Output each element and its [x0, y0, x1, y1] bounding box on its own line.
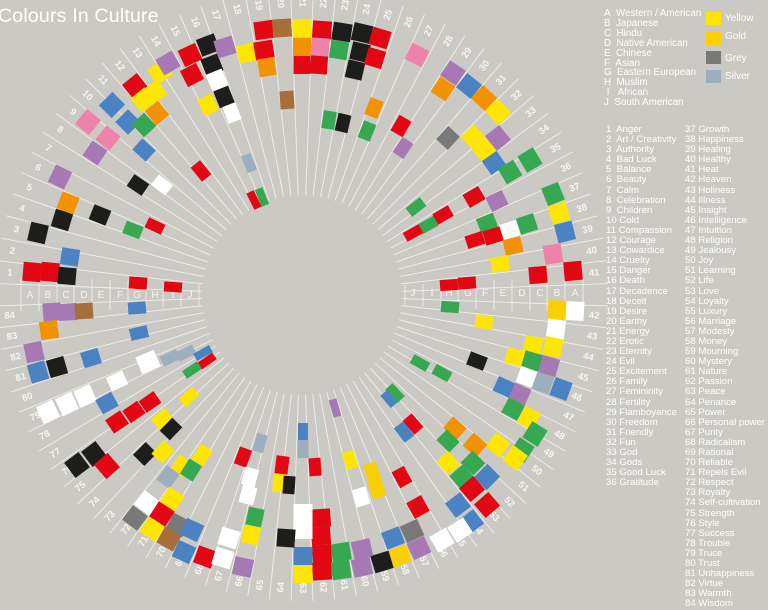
sector number labels: 51 — [516, 479, 532, 495]
keyword list column 2: 56 Marriage — [685, 316, 736, 327]
sector number labels: 28 — [441, 34, 456, 49]
ring letters right: C — [536, 288, 544, 299]
sector number labels: 70 — [154, 545, 169, 559]
cells: upper-right quadrant — [292, 19, 583, 291]
keyword list column 2: 66 Personal power — [685, 417, 765, 428]
sector number labels: 79 — [28, 410, 43, 424]
keyword list column 1: 28 Fertility — [606, 397, 650, 408]
keyword list column 2: 61 Nature — [685, 366, 727, 377]
legend: colour swatches — [706, 12, 754, 83]
keyword list column 2: 82 Virtue — [685, 578, 723, 589]
ring letters right: I — [431, 288, 433, 299]
sector number labels: 61 — [337, 579, 350, 592]
sector number labels: 37 — [568, 181, 582, 195]
ring letters left: A — [27, 290, 34, 301]
keyword list column 2: 42 Heaven — [685, 174, 731, 185]
sector number labels: 14 — [148, 34, 163, 49]
keyword list column 2: 37 Growth — [685, 124, 729, 135]
keyword list column 2: 79 Truce — [685, 548, 722, 559]
keyword list column 1: 15 Danger — [606, 265, 651, 276]
keyword list column 1: 8 Celebration — [606, 195, 666, 206]
ring letters right: J — [410, 288, 416, 299]
sector number labels: 53 — [486, 509, 501, 524]
keyword list column 2: 38 Happiness — [685, 134, 744, 145]
keyword list column 2: 43 Holiness — [685, 185, 735, 196]
sector number labels: 55 — [453, 534, 468, 549]
keyword list column 2: 44 Illness — [685, 195, 726, 206]
sector number labels: 35 — [548, 141, 564, 156]
keyword list column 2: 40 Healthy — [685, 154, 731, 165]
keyword list column 1: 21 Energy — [606, 326, 650, 337]
keyword list column 1: 5 Balance — [606, 164, 651, 175]
sector number labels: 75 — [73, 479, 89, 494]
sector number labels: 1 — [7, 267, 14, 279]
keyword list column 1: 31 Friendly — [606, 427, 653, 438]
keyword list column 2: 74 Self-cultivation — [685, 497, 761, 508]
cells: lower-left quadrant — [23, 301, 296, 578]
keyword list column 2: 50 Joy — [685, 255, 713, 266]
sector number labels: 4 — [18, 203, 27, 215]
keyword list column 1: 32 Fun — [606, 437, 636, 448]
keyword list column 1: 9 Children — [606, 205, 652, 216]
keyword list column 1: 3 Authority — [606, 144, 654, 155]
legend: cultures: J South American — [604, 97, 684, 108]
keyword list column 2: 64 Penance — [685, 397, 736, 408]
sector number labels: 39 — [581, 223, 594, 236]
legend: colour swatches: Yellow — [725, 13, 754, 24]
keyword list column 1: 22 Erotic — [606, 336, 644, 347]
sector number labels: 68 — [193, 563, 207, 576]
keyword list column 1: 26 Family — [606, 376, 648, 387]
sector number labels: 81 — [14, 371, 28, 384]
sector number labels: 52 — [502, 495, 517, 510]
keyword list column 1: 36 Gratitude — [606, 477, 659, 488]
keyword list column 1: 13 Cowardice — [606, 245, 665, 256]
sector number labels: 64 — [275, 581, 287, 593]
keyword list column 1: 35 Good Luck — [606, 467, 666, 478]
sector number labels: 7 — [43, 142, 53, 155]
ring letters left: F — [117, 290, 123, 301]
sector number labels: 11 — [95, 73, 111, 88]
keyword list column 2: 71 Repels Evil — [685, 467, 746, 478]
keyword list column 1: 12 Courage — [606, 235, 656, 246]
sector number labels: 32 — [509, 88, 524, 103]
keyword list column 2: 60 Mystery — [685, 356, 732, 367]
sector number labels: 41 — [588, 267, 601, 279]
sector number labels: 83 — [6, 330, 18, 343]
keyword list column 1: 33 God — [606, 447, 637, 458]
sector number labels: 54 — [470, 522, 486, 538]
sector number labels: 71 — [136, 533, 151, 549]
ring letters left: J — [188, 290, 192, 301]
keyword list column 2: 84 Wisdom — [685, 598, 733, 609]
cells: upper-left quadrant — [22, 18, 295, 293]
sector number labels: 44 — [582, 351, 595, 364]
ring letters left: D — [80, 290, 88, 301]
keyword list column 1: 11 Compassion — [606, 225, 672, 236]
title: Colours In Culture — [0, 5, 159, 27]
sector number labels: 50 — [529, 463, 544, 478]
keyword list column 2: 51 Learning — [685, 265, 736, 276]
sector number labels: 76 — [60, 463, 75, 478]
ring letters left: B — [45, 290, 52, 301]
sector number labels: 84 — [4, 310, 16, 322]
ring letters left — [27, 290, 192, 301]
keyword list column 1: 30 Freedom — [606, 417, 658, 428]
sector number labels: 43 — [586, 330, 598, 343]
sector number labels: 33 — [524, 105, 539, 120]
legend: cultures: C Hindu — [604, 28, 642, 39]
sector number labels: 40 — [586, 245, 598, 258]
legend: cultures: E Chinese — [604, 48, 652, 59]
keyword list column 2: 55 Luxury — [685, 306, 727, 317]
legend: colour swatches: Grey — [725, 53, 747, 64]
sector number labels: 38 — [575, 202, 589, 215]
keyword list column 2: 48 Religion — [685, 235, 733, 246]
keyword list column 1: 25 Excitement — [606, 366, 667, 377]
legend: cultures: H Muslim — [604, 77, 648, 88]
sector number labels: 57 — [417, 554, 431, 569]
sector number labels — [4, 0, 601, 593]
ring letters left: G — [133, 290, 141, 301]
ring letters left: E — [98, 290, 105, 301]
legend: cultures: B Japanese — [604, 18, 658, 29]
ring letters right: F — [482, 288, 488, 299]
sector number labels: 34 — [537, 122, 552, 137]
keyword list column 2: 65 Power — [685, 407, 726, 418]
ring letters right — [410, 288, 579, 299]
ring letters right: A — [572, 288, 579, 299]
keyword list column 1: 4 Bad Luck — [606, 154, 657, 165]
sector number labels: 13 — [129, 45, 144, 60]
keyword list column 2: 47 Intuition — [685, 225, 732, 236]
sector number labels: 31 — [494, 72, 509, 88]
sector number labels: 5 — [25, 182, 34, 194]
keyword list column 2: 58 Money — [685, 336, 727, 347]
sector number labels: 25 — [382, 8, 395, 22]
keyword list column 2: 54 Loyalty — [685, 296, 729, 307]
sector number labels: 27 — [422, 24, 436, 38]
keyword list column 2: 76 Style — [685, 518, 720, 529]
sector number labels: 29 — [460, 45, 475, 60]
ring letters right: H — [445, 288, 453, 299]
sector number labels: 80 — [21, 390, 34, 404]
keyword list column 1: 23 Eternity — [606, 346, 652, 357]
sector number labels: 36 — [559, 161, 573, 175]
keyword list column 2: 73 Royalty — [685, 487, 730, 498]
keyword list column 1: 27 Femininity — [606, 386, 663, 397]
legend: cultures: F Asian — [604, 58, 640, 69]
sector number labels: 62 — [317, 582, 329, 593]
sector number labels: 65 — [254, 578, 267, 591]
ring letters left: C — [62, 290, 70, 301]
sector number labels: 72 — [119, 522, 134, 537]
sector number labels: 16 — [188, 15, 202, 29]
keyword list column 1 — [606, 124, 677, 488]
ring letters right: E — [500, 288, 507, 299]
sector number labels: 47 — [561, 410, 576, 424]
keyword list column 2: 62 Passion — [685, 376, 732, 387]
keyword list column 1: 14 Cruelty — [606, 255, 650, 266]
keyword list column 2: 70 Reliable — [685, 457, 733, 468]
keyword list column 2: 67 Purity — [685, 427, 723, 438]
sector number labels: 58 — [397, 563, 411, 576]
keyword list column 2: 41 Heat — [685, 164, 719, 175]
sector number labels: 49 — [541, 446, 556, 461]
ring letters left: I — [172, 290, 174, 301]
sector number labels: 6 — [33, 162, 43, 174]
sector number labels: 59 — [378, 570, 391, 583]
sector number labels: 77 — [48, 446, 63, 461]
sector number labels: 73 — [103, 509, 118, 524]
ring letters right: G — [464, 288, 472, 299]
keyword list column 2: 46 Intelligence — [685, 215, 747, 226]
legend: cultures: A Western / American — [604, 8, 701, 19]
sector number labels: 74 — [87, 494, 103, 510]
keyword list column 2: 39 Healing — [685, 144, 731, 155]
keyword list column 2: 49 Jealousy — [685, 245, 736, 256]
legend: cultures: I African — [607, 87, 648, 98]
keyword list column 2: 78 Trouble — [685, 538, 730, 549]
keyword list column 1: 18 Deceit — [606, 296, 647, 307]
sector number labels: 12 — [112, 58, 127, 73]
ring letters right: D — [518, 288, 526, 299]
sector number labels: 45 — [577, 371, 590, 384]
keyword list column 1: 10 Cold — [606, 215, 639, 226]
keyword list column 2: 68 Radicalism — [685, 437, 745, 448]
sector number labels: 15 — [168, 24, 182, 39]
sector number labels: 78 — [38, 428, 52, 443]
legend: colour swatches: Gold — [725, 31, 746, 42]
keyword list column 2: 75 Strength — [685, 508, 735, 519]
sector number labels: 56 — [435, 545, 450, 559]
sector number labels: 69 — [173, 554, 187, 569]
keyword list column 1: 29 Flamboyance — [606, 407, 677, 418]
sector number labels: 18 — [230, 3, 243, 16]
sector number labels: 9 — [67, 106, 78, 118]
sector number labels: 63 — [297, 583, 308, 593]
keyword list column 1: 16 Death — [606, 275, 645, 286]
sector number labels: 24 — [361, 2, 374, 16]
sector number labels: 17 — [209, 8, 222, 22]
sector number labels: 26 — [402, 15, 416, 29]
keyword list column 2: 81 Unhappiness — [685, 568, 754, 579]
ring letters right: B — [554, 288, 561, 299]
sector number labels: 60 — [358, 575, 371, 588]
ring letters left: H — [151, 290, 159, 301]
sector number labels: 10 — [80, 88, 95, 103]
sector number labels: 48 — [552, 428, 566, 443]
keyword list column 2: 69 Rational — [685, 447, 734, 458]
keyword list column 2: 77 Success — [685, 528, 735, 539]
sector number labels: 66 — [233, 575, 246, 588]
keyword list column 2: 53 Love — [685, 286, 719, 296]
spokes — [0, 0, 608, 601]
keyword list column 1: 34 Gods — [606, 457, 642, 468]
keyword list column 2: 80 Trust — [685, 558, 720, 569]
keyword list column 1: 2 Art / Creativity — [606, 134, 676, 145]
keyword list column 2 — [685, 124, 765, 609]
legend: cultures: G Eastern European — [604, 67, 696, 78]
keyword list column 2: 63 Peace — [685, 386, 726, 397]
sector number labels: 2 — [9, 246, 16, 257]
sector number labels: 3 — [13, 224, 20, 236]
ring ticks in gaps — [21, 279, 583, 311]
legend: cultures — [604, 8, 701, 108]
sector number labels: 82 — [9, 351, 22, 364]
keyword list column 2: 59 Mourning — [685, 346, 738, 357]
keyword list column 1: 20 Earthy — [606, 316, 647, 327]
keyword list column 2: 52 Life — [685, 275, 714, 286]
keyword list column 1: 7 Calm — [606, 185, 639, 196]
keyword list column 2: 72 Respect — [685, 477, 734, 488]
keyword list column 1: 1 Anger — [606, 124, 642, 135]
keyword list column 2: 83 Warmth — [685, 588, 732, 599]
keyword list column 1: 6 Beauty — [606, 174, 647, 185]
sector number labels: 42 — [589, 310, 600, 322]
sector number labels: 30 — [477, 58, 492, 73]
sector number labels: 46 — [570, 390, 583, 404]
legend: colour swatches: Silver — [725, 71, 750, 82]
cells: lower-right quadrant — [294, 300, 584, 583]
sector number labels: 67 — [213, 570, 226, 583]
keyword list column 2: 45 Insight — [685, 205, 727, 216]
keyword list column 2: 57 Modesty — [685, 326, 735, 337]
keyword list column 1: 17 Decadence — [606, 286, 668, 296]
keyword list column 1: 19 Desire — [606, 306, 647, 317]
keyword list column 1: 24 Evil — [606, 356, 635, 367]
legend: cultures: D Native American — [604, 38, 688, 49]
sector number labels: 8 — [55, 124, 65, 136]
